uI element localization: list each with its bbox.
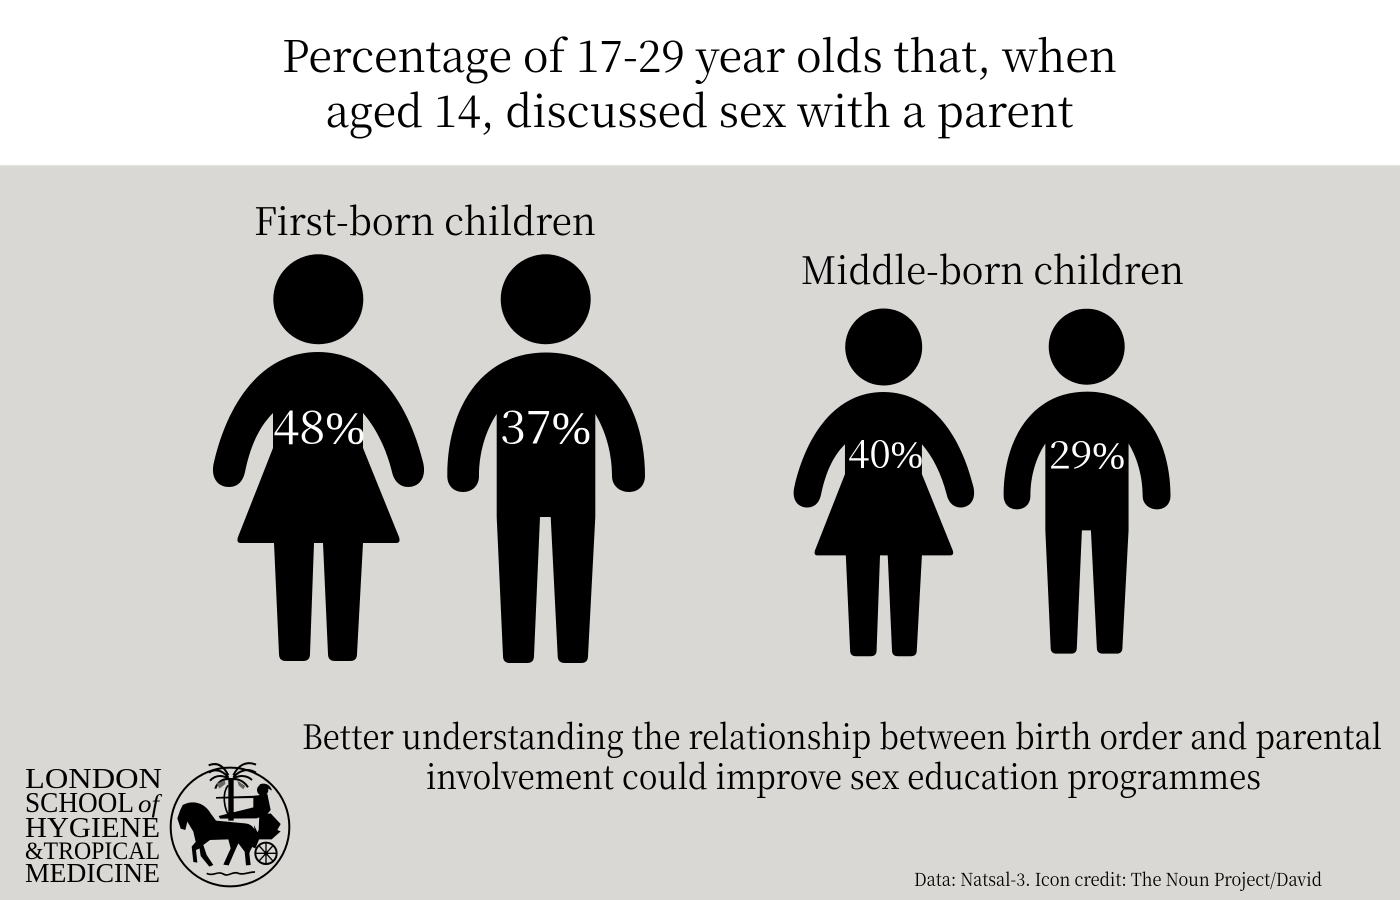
logo wordmark: &TROPICAL [25, 838, 160, 865]
logo wordmark [25, 763, 162, 888]
text: data source and icon credit: Data: Natsal-3. Icon credit: The Noun Project/David [914, 866, 1322, 892]
title: aged 14, discussed sex with a parent [326, 76, 1074, 140]
water [207, 872, 255, 875]
text block: conclusion [302, 710, 1382, 799]
icon: middle-born girl, 40%: 40% [848, 424, 923, 478]
icon: middle-born girl, 40% [794, 308, 974, 656]
logo wordmark: HYGIENE [25, 812, 160, 844]
archer and bow [224, 785, 231, 819]
icon: middle-born boy, 29%: 29% [1049, 424, 1125, 480]
icon: first-born boy, 37%: 37% [500, 392, 591, 458]
text block: conclusion: involvement could improve sex education programmes [426, 750, 1261, 799]
heading: middle-born children: Middle-born children [801, 240, 1184, 295]
icon: first-born girl, 48% [213, 254, 424, 661]
logo wordmark: LONDON [25, 763, 162, 795]
title [282, 21, 1117, 140]
logo wordmark: of [138, 791, 162, 818]
icon: first-born boy, 37% [447, 254, 645, 663]
heading: first-born children: First-born children [254, 191, 596, 246]
logo: London School of Hygiene & Tropical Medicine [25, 763, 289, 888]
logo seal: horse and chariot [171, 763, 289, 886]
chariot [253, 813, 281, 839]
title: Percentage of 17-29 year olds that, when [282, 21, 1117, 85]
icon: first-born girl, 48%: 48% [273, 392, 365, 458]
horse [177, 802, 256, 867]
logo wordmark: MEDICINE [25, 858, 160, 888]
palm tree [209, 763, 256, 789]
icon: middle-born boy, 29% [1004, 309, 1171, 654]
logo wordmark: SCHOOL [25, 788, 134, 819]
